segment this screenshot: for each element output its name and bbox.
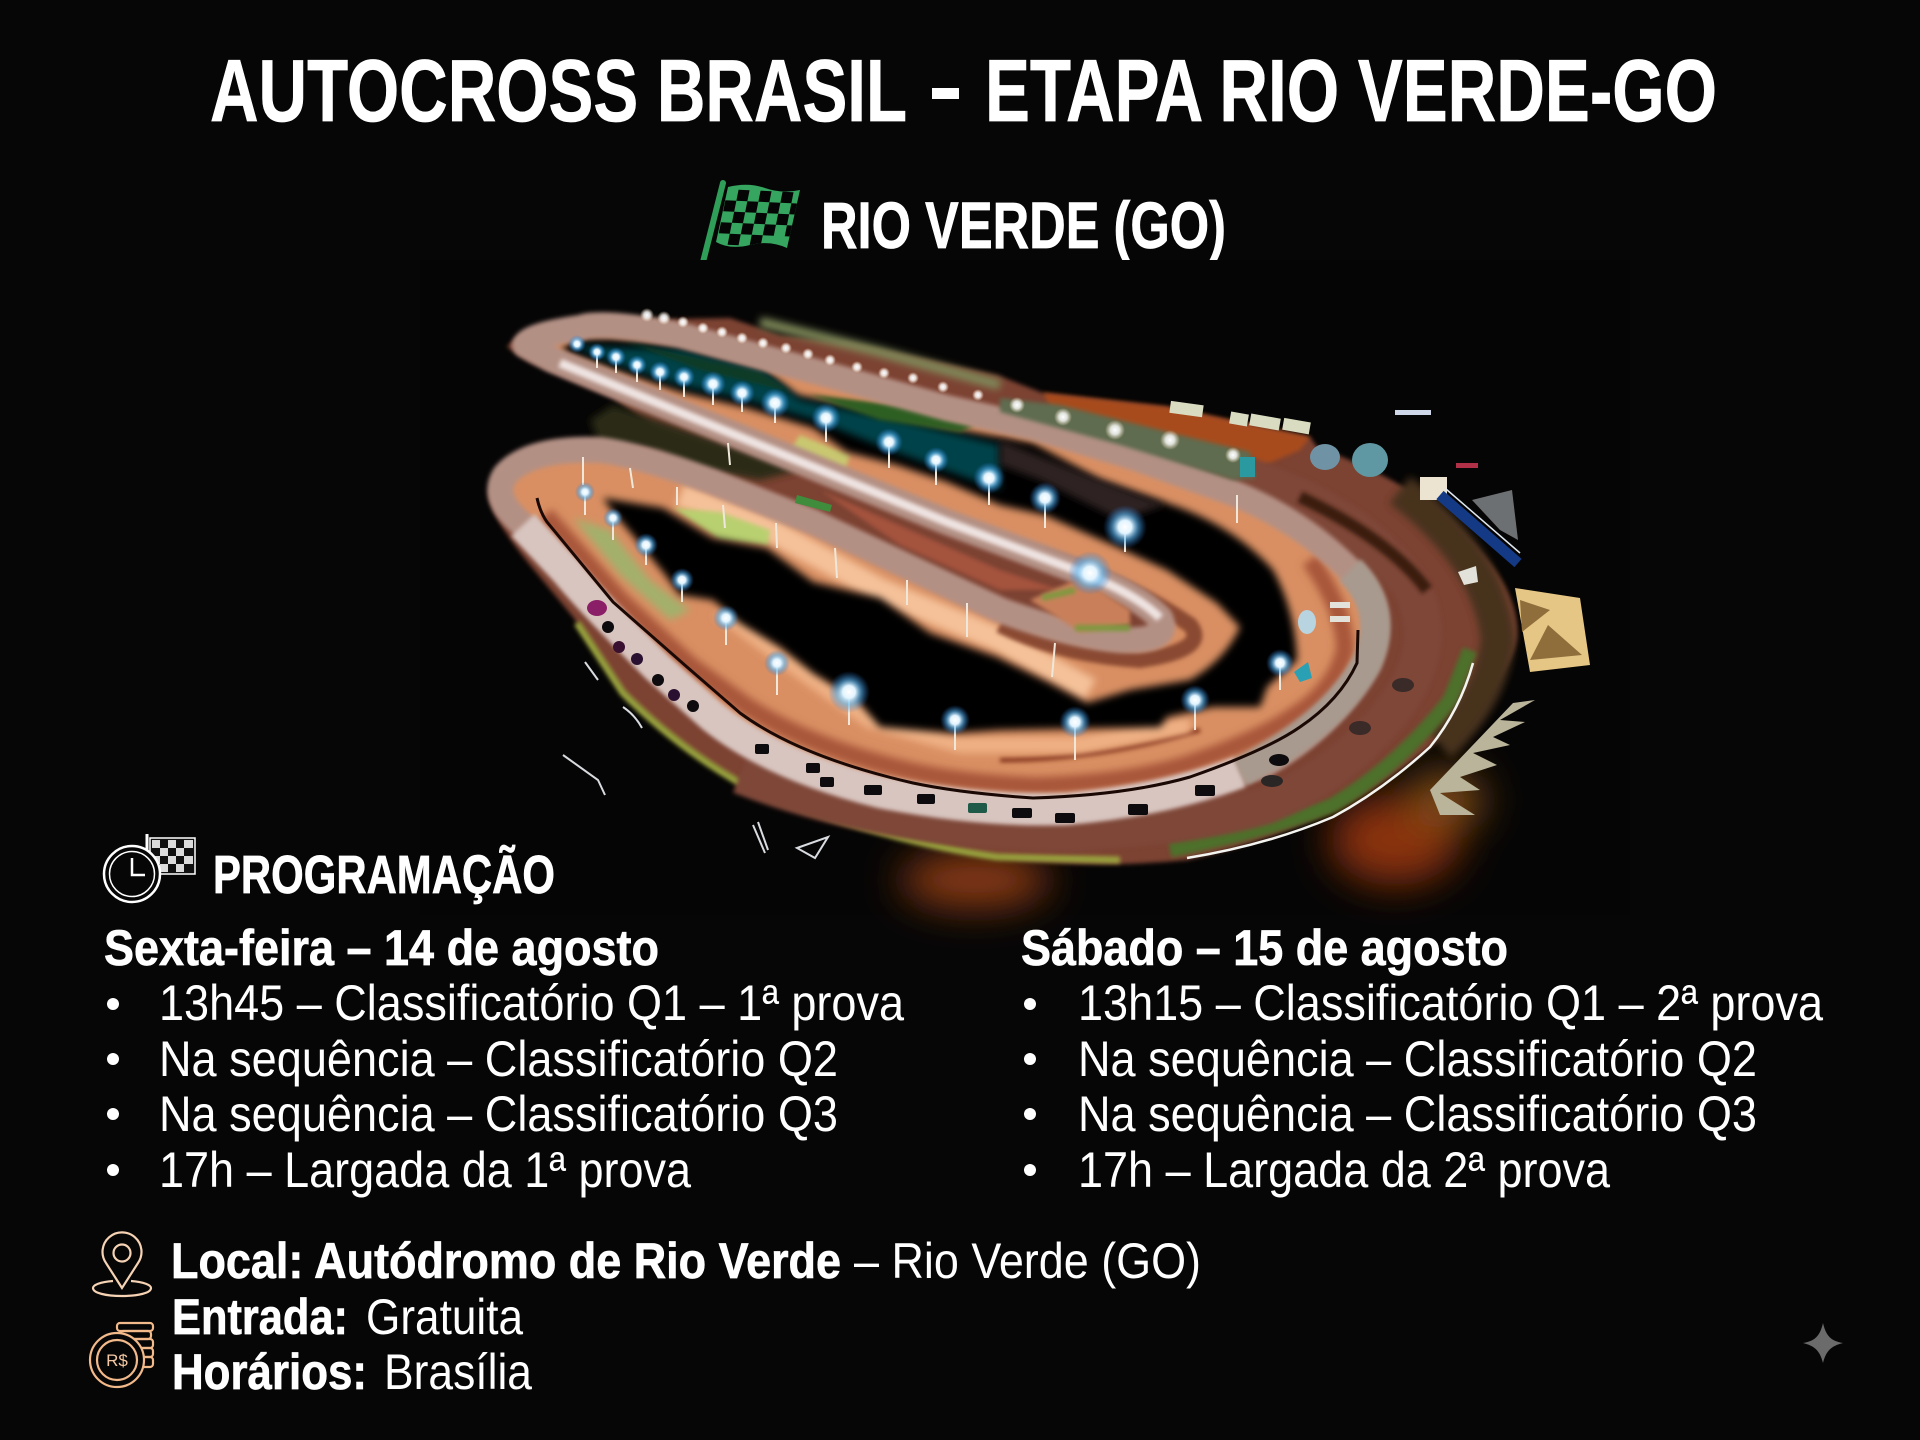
island green edges — [1042, 590, 1130, 628]
ground glow around the track — [900, 770, 1485, 908]
dark red streak in the lower ring — [1000, 730, 1200, 760]
schedule: saturday: Na sequência – Classificatório Q3 — [1078, 1086, 1757, 1142]
right tents: blue stand — [1420, 477, 1520, 563]
outer olive shoulder — [1400, 490, 1498, 745]
dark green strip in pond — [625, 342, 790, 392]
lamps: blue row and lake row — [568, 335, 1294, 738]
icon: sparkle watermark — [1803, 1323, 1843, 1363]
schedule: friday: 13h45 – Classificatório Q1 – 1ª prova — [159, 975, 904, 1031]
schedule: saturday: Na sequência – Classificatório Q2 — [1078, 1031, 1757, 1087]
domes — [1310, 410, 1478, 477]
schedule: friday: Na sequência – Classificatório Q3 — [159, 1086, 838, 1142]
schedule: friday: 17h – Largada da 1ª prova — [159, 1142, 691, 1198]
large dark C-shaped pond and infield — [563, 338, 1297, 733]
schedule: friday — [104, 920, 904, 1198]
heading: programação: PROGRAMAÇÃO — [213, 845, 555, 905]
teal glow upper pond — [570, 345, 1000, 490]
white pad and pale pieces — [1294, 566, 1478, 682]
green-pale field strip — [573, 518, 690, 620]
central strip hatch — [590, 405, 800, 480]
pit canopy — [1000, 398, 1255, 480]
schedule: saturday: 17h – Largada da 2ª prova — [1078, 1142, 1610, 1198]
stray scene objects — [563, 662, 828, 858]
lower-left pale road highlight — [523, 525, 1240, 809]
title — [210, 41, 1717, 140]
lamp poles — [583, 352, 1280, 760]
peach lit strip along the lake — [680, 495, 1090, 690]
oval end island — [1030, 578, 1130, 632]
green strip above pond — [810, 395, 975, 432]
schedule: saturday: Sábado – 15 de agosto — [1021, 920, 1508, 976]
info: admission: Entrada: — [172, 1289, 348, 1345]
icon: coins with R$ — [90, 1323, 153, 1387]
central strip red dirt — [820, 490, 1060, 590]
inner track edge line — [537, 498, 1358, 798]
spiral rings at end of straight — [1000, 545, 1194, 660]
right tents: cream — [1515, 588, 1590, 672]
schedule: saturday: 13h15 – Classificatório Q1 – 2ª prova — [1078, 975, 1823, 1031]
schedule: saturday — [1021, 920, 1823, 1198]
pale road surface — [500, 325, 1375, 809]
info: time zone — [172, 1344, 532, 1400]
title: ETAPA RIO VERDE-GO — [985, 41, 1717, 140]
cream tent folds — [1520, 600, 1582, 660]
right grey road highlight — [1240, 570, 1375, 772]
green patch — [795, 495, 832, 512]
info: admission — [172, 1289, 523, 1345]
info: venue: – Rio Verde (GO) — [854, 1233, 1201, 1289]
green verge, lower left — [577, 623, 1120, 860]
icon: coins with R$: R$ — [106, 1351, 128, 1370]
dirt shadow arc — [1300, 497, 1427, 590]
green verge, lower right — [1170, 650, 1470, 850]
schedule: friday: Sexta-feira – 14 de agosto — [104, 920, 659, 976]
kiosk — [1240, 457, 1255, 477]
icon: green checkered flag — [700, 180, 800, 260]
info: time zone: Horários: — [172, 1344, 367, 1400]
bright lit band under the lake — [720, 610, 1190, 745]
sawtooth tents — [1430, 700, 1535, 815]
infield — [500, 325, 1375, 809]
icon: stopwatch with checkered flag — [104, 834, 195, 902]
cars on track — [587, 600, 1414, 823]
red dirt band — [740, 470, 1423, 833]
yellow-green field strip — [673, 508, 770, 545]
location heading: RIO VERDE (GO) — [821, 188, 1226, 262]
straight white highlight — [560, 363, 1160, 618]
lamps: top row — [640, 308, 1241, 463]
info: admission: Gratuita — [366, 1289, 523, 1345]
pit tents — [1169, 401, 1311, 434]
photo: aerial view of the circuit at night — [420, 260, 1630, 915]
schedule: friday: Na sequência – Classificatório Q2 — [159, 1031, 838, 1087]
yellow-green band below the straight — [790, 435, 850, 470]
outer white rail — [1187, 663, 1473, 858]
orange pit ground — [1043, 393, 1310, 470]
info: time zone: Brasília — [384, 1344, 532, 1400]
red-brown band along the inner track edge — [545, 515, 1345, 786]
title: AUTOCROSS BRASIL — [210, 41, 907, 140]
top row canopy light — [760, 322, 1000, 385]
icon: location pin — [93, 1232, 151, 1296]
track silhouette — [490, 318, 1517, 864]
info: venue: Local: Autódromo de Rio Verde — [171, 1233, 841, 1289]
brown upper crescent haze — [1000, 440, 1165, 520]
